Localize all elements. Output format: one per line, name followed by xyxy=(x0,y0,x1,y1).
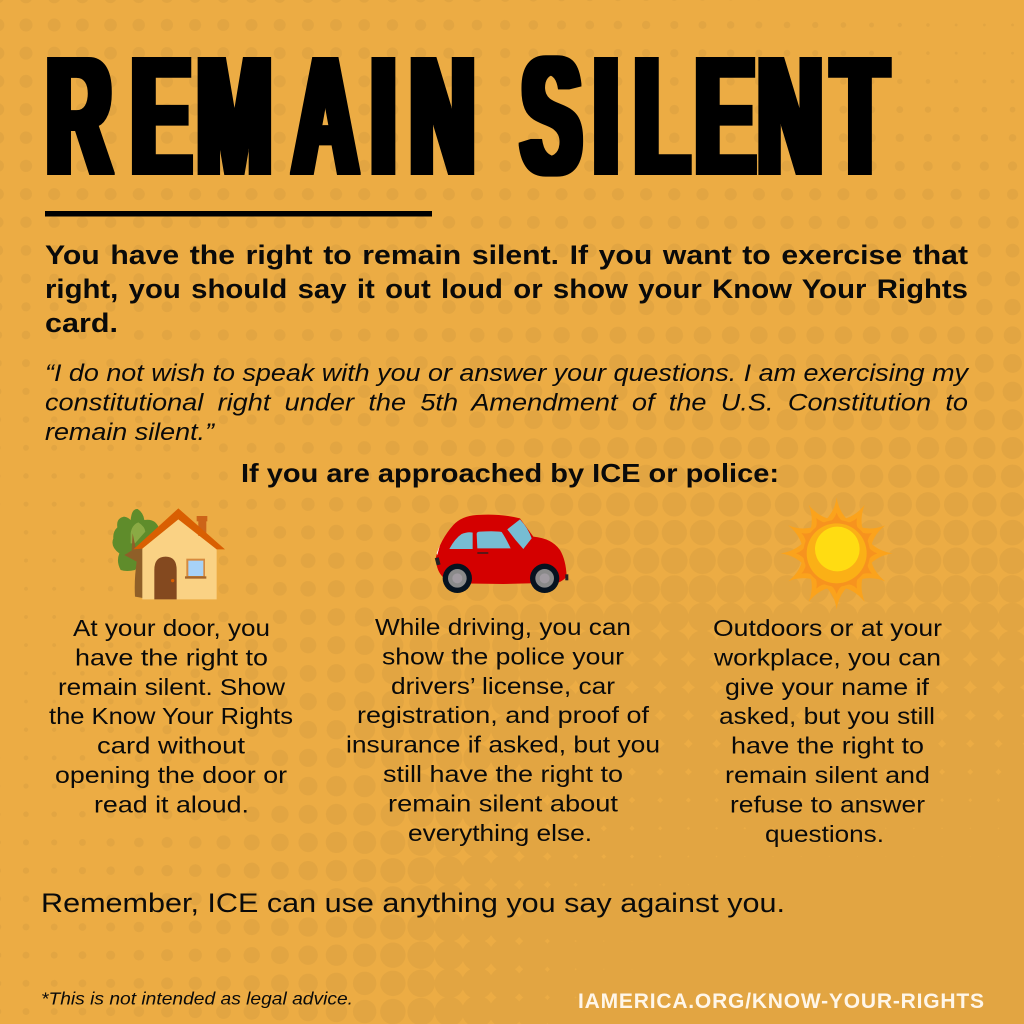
column: at your door: read it aloud. xyxy=(94,791,249,817)
column: while driving: drivers’ license, car xyxy=(391,673,615,699)
column: at your door: have the right to xyxy=(75,644,268,670)
intro statement: You have the right to remain silent. If you want to exercise that xyxy=(45,240,968,270)
column: while driving: insurance if asked, but you xyxy=(346,732,660,758)
website url: IAMERICA.ORG/KNOW-YOUR-RIGHTS xyxy=(578,990,984,1013)
column: outdoors or workplace xyxy=(713,615,942,847)
column: while driving: registration, and proof of xyxy=(357,702,650,728)
subheading: If you are approached by ICE or police: xyxy=(241,458,779,488)
reminder: Remember, ICE can use anything you say against you. xyxy=(41,888,785,918)
disclaimer: *This is not intended as legal advice. xyxy=(41,989,353,1009)
intro statement: card. xyxy=(45,308,118,338)
column: outdoors or workplace: give your name if xyxy=(725,674,930,700)
intro statement xyxy=(45,240,968,338)
column: at your door: remain silent. Show xyxy=(58,674,285,700)
column: at your door: At your door, you xyxy=(73,615,270,641)
column: while driving: While driving, you can xyxy=(375,614,631,640)
icon: sun xyxy=(780,497,893,610)
quoted statement: “I do not wish to speak with you or answer your questions. I am exercising my xyxy=(45,360,970,387)
column: outdoors or workplace: remain silent and xyxy=(725,762,930,788)
column: at your door: opening the door or xyxy=(55,762,287,788)
column: at your door: the Know Your Rights xyxy=(49,703,293,729)
quoted statement: constitutional right under the 5th Amendment of the U.S. Constitution to xyxy=(45,390,968,416)
quoted statement xyxy=(45,360,970,446)
title: SILENT xyxy=(522,22,887,210)
quoted statement: remain silent.” xyxy=(45,419,215,446)
column: while driving: show the police your xyxy=(382,643,624,669)
icon: house with tree xyxy=(112,508,225,599)
column: at your door xyxy=(49,615,293,817)
column: outdoors or workplace: workplace, you can xyxy=(713,644,941,670)
title: REMAIN xyxy=(47,22,475,210)
icon: red car xyxy=(435,515,568,593)
column: outdoors or workplace: have the right to xyxy=(731,733,924,759)
column: outdoors or workplace: Outdoors or at your xyxy=(713,615,942,641)
column: at your door: card without xyxy=(97,733,246,759)
column: while driving xyxy=(346,614,660,846)
column: while driving: remain silent about xyxy=(388,790,619,816)
title underline xyxy=(45,211,432,216)
column: outdoors or workplace: asked, but you still xyxy=(719,703,935,729)
column: outdoors or workplace: refuse to answer xyxy=(730,791,925,817)
column: outdoors or workplace: questions. xyxy=(765,821,884,847)
intro statement: right, you should say it out loud or show your Know Your Rights xyxy=(45,274,968,304)
column: while driving: still have the right to xyxy=(383,761,623,787)
title xyxy=(47,22,887,210)
column: while driving: everything else. xyxy=(408,820,592,846)
